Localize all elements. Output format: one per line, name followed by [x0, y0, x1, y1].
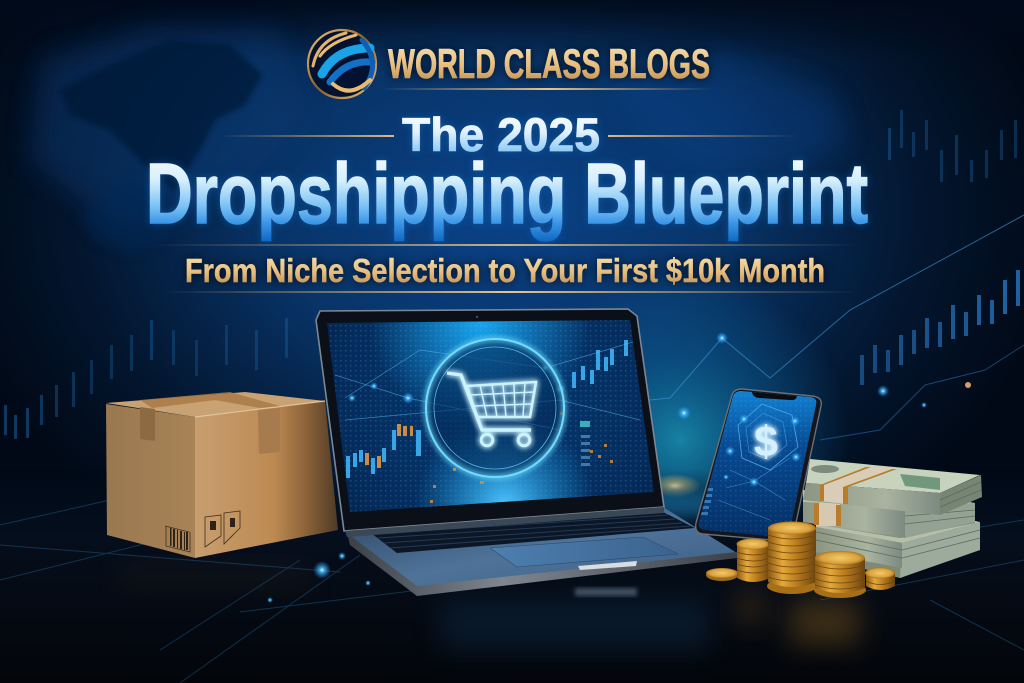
gold coins: [706, 522, 895, 598]
teal glow behind laptop and network lines: [500, 215, 1024, 610]
icon: shopping cart: [447, 373, 536, 446]
title line: The 2025: The 2025: [402, 108, 600, 161]
cart circle emblem: [426, 339, 564, 477]
subtitle: From Niche Selection to Your First $10k Month: [185, 252, 825, 289]
stock chart backdrop right: [860, 110, 1020, 385]
coin stack front: [814, 551, 866, 598]
stock chart backdrop left: [4, 318, 288, 439]
cash stacks: [803, 459, 982, 578]
laptop base: [347, 507, 737, 596]
smartphone: [690, 385, 825, 541]
logo mark: [308, 30, 376, 98]
laptop lid: [316, 309, 664, 531]
cardboard box: [106, 392, 338, 558]
rule below subtitle: [160, 291, 860, 293]
icon: dollar sign: $: [754, 418, 778, 466]
rule above subtitle: [150, 244, 862, 246]
table surface: [0, 470, 1024, 683]
coin stack right small: [865, 568, 895, 590]
coin stack small: [736, 538, 770, 582]
flat coin: [706, 568, 738, 581]
brand underline: [380, 88, 715, 90]
cash stack top: [803, 459, 982, 515]
world map backdrop: [30, 25, 850, 255]
brand name: WORLD CLASS BLOGS: [388, 40, 710, 87]
laptop: [316, 309, 737, 596]
cash stack bottom: [816, 505, 980, 578]
cash stack middle: [803, 490, 975, 538]
coin stack tall: [767, 522, 817, 594]
laptop screen: [320, 315, 660, 515]
